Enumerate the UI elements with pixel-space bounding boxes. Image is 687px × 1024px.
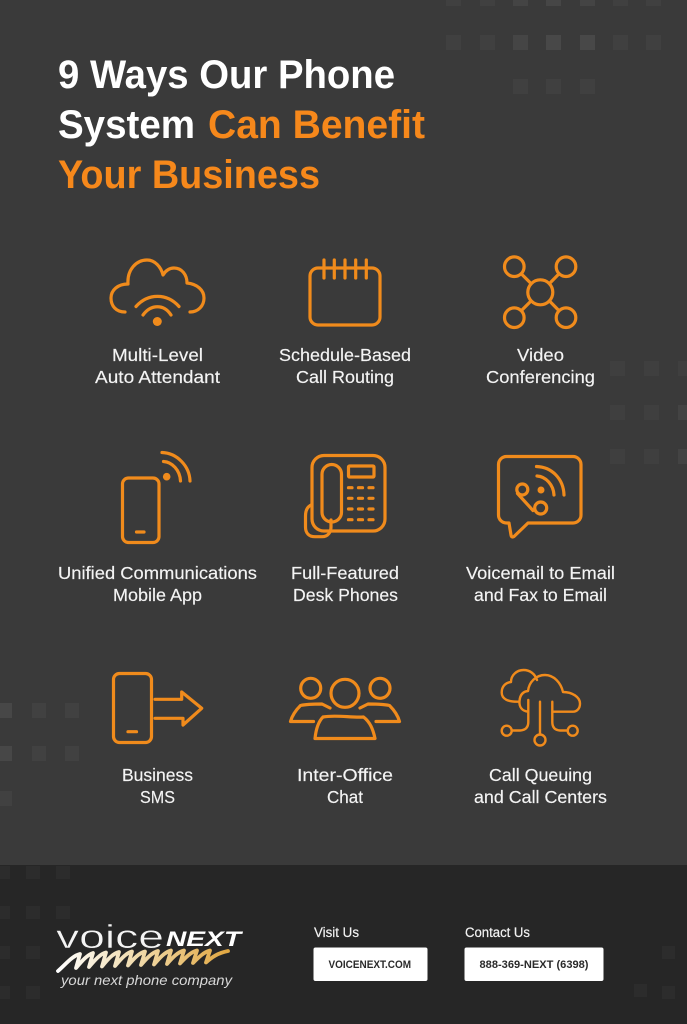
contact: phone — [464, 925, 604, 981]
label: Multi-Level Auto Attendant — [95, 345, 220, 387]
label: Video Conferencing: Conferencing — [486, 367, 595, 387]
label: Inter-Office Chat — [297, 765, 393, 807]
label: Call Queuing and Call Centers: Call Queuing — [489, 765, 592, 785]
icon: group of people — [290, 678, 400, 738]
label: Business SMS: Business — [122, 765, 193, 785]
icon: conferencing network — [504, 257, 576, 328]
logo: VoiceNext: your next phone company — [60, 972, 233, 988]
label: Voicemail to Email and Fax to Email: Voicemail to Email — [466, 563, 615, 583]
title: Your Business — [58, 153, 320, 197]
logo: VoiceNext: voice — [56, 918, 164, 955]
label: Business SMS: SMS — [140, 787, 175, 807]
label: Unified Communications Mobile App: Mobile App — [113, 585, 202, 605]
icon: desk phone — [306, 456, 385, 537]
label: Unified Communications Mobile App — [58, 563, 257, 605]
icon: voicemail speech bubble — [498, 456, 581, 537]
icon: calendar — [310, 260, 380, 325]
logo: VoiceNext: NEXT — [166, 928, 244, 951]
label: Full-Featured Desk Phones — [291, 563, 399, 605]
label: Video Conferencing: Video — [517, 345, 564, 365]
icon: phone with arrow — [114, 674, 202, 742]
contact: visit us — [314, 925, 428, 981]
label: Multi-Level Auto Attendant: Multi-Level — [112, 345, 203, 365]
label: Business SMS — [122, 765, 193, 807]
label: Call Queuing and Call Centers — [474, 765, 607, 807]
contact: phone: 888-369-NEXT (6398) — [480, 959, 589, 971]
label: Full-Featured Desk Phones: Desk Phones — [293, 585, 398, 605]
icon: cloud with wifi — [111, 260, 204, 326]
label: Schedule-Based Call Routing — [279, 345, 411, 387]
icon: cloud tree — [502, 670, 580, 746]
label: Voicemail to Email and Fax to Email — [466, 563, 615, 605]
logo: VoiceNext — [56, 918, 244, 988]
contact: phone: Contact Us — [465, 925, 530, 940]
label: Multi-Level Auto Attendant: Auto Attendant — [95, 367, 220, 387]
label: Full-Featured Desk Phones: Full-Featured — [291, 563, 399, 583]
panel: footer — [0, 865, 687, 1024]
contact: visit us: Visit Us — [314, 925, 359, 940]
label: Schedule-Based Call Routing: Schedule-Based — [279, 345, 411, 365]
contact: visit us: VOICENEXT.COM — [328, 959, 411, 971]
label: Inter-Office Chat: Inter-Office — [297, 765, 393, 785]
icon: mobile with signal — [122, 452, 190, 542]
label: Call Queuing and Call Centers: and Call Centers — [474, 787, 607, 807]
label: Schedule-Based Call Routing: Call Routing — [296, 367, 394, 387]
title — [58, 53, 425, 197]
title: 9 Ways Our Phone — [58, 53, 395, 97]
label: Inter-Office Chat: Chat — [327, 787, 363, 807]
label: Video Conferencing — [486, 345, 595, 387]
label: Voicemail to Email and Fax to Email: and Fax to Email — [474, 585, 607, 605]
title: Can Benefit — [208, 103, 425, 147]
title: System — [58, 103, 195, 147]
label: Unified Communications Mobile App: Unified Communications — [58, 563, 257, 583]
